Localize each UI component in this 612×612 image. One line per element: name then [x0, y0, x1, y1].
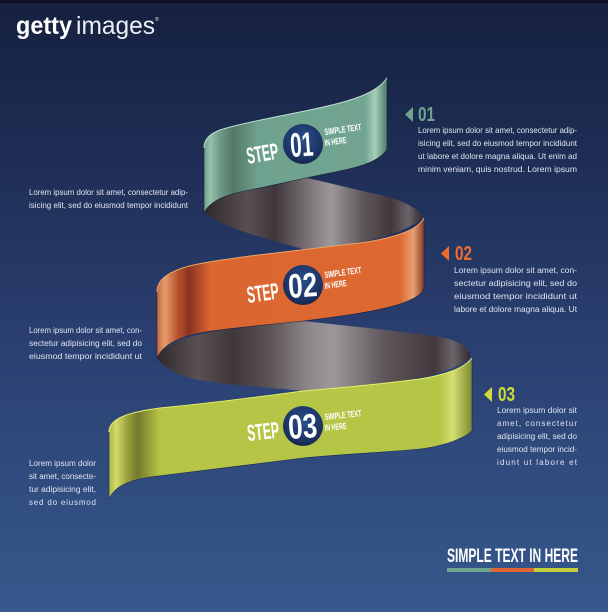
step 3 label: IN HERE	[324, 421, 347, 433]
callout 03	[484, 384, 578, 467]
left text block 1: Lorem ipsum dolor sit amet, consectetur adip-	[29, 188, 188, 197]
left text block 3	[29, 459, 96, 507]
panel: step 1 teal ribbon	[204, 78, 387, 213]
callout 01	[405, 104, 578, 174]
step 3 label: STEP	[246, 417, 280, 446]
left text block 3: Lorem ipsum dolor	[29, 459, 96, 468]
step 2 label: SIMPLE TEXT	[324, 265, 362, 280]
step 3 label: SIMPLE TEXT	[324, 408, 362, 422]
top edge highlight	[109, 358, 472, 432]
step 2 label: IN HERE	[324, 278, 347, 291]
step 2 label: 02	[287, 266, 318, 306]
inner surface: upper grey ribbon	[204, 178, 423, 249]
left text block 3: sed do eiusmod	[29, 498, 96, 507]
footer heading with colour bar	[447, 546, 578, 572]
callout 02: labore et dolore magna aliqua. Ut	[454, 305, 578, 314]
callout 02: Lorem ipsum dolor sit amet, con-	[454, 266, 577, 275]
callout 03: amet, consectetur	[497, 419, 577, 428]
callout 02: eiusmod tempor incididunt ut	[454, 292, 578, 301]
callout 02	[441, 243, 578, 314]
callout 03: Lorem ipsum dolor sit	[497, 406, 578, 415]
step 1 label	[244, 122, 362, 169]
top edge highlight	[157, 218, 424, 292]
callout 03: adipisicing elit, sed do	[497, 432, 578, 441]
left text block 1: isicing elit, sed do eiusmod tempor incididunt	[29, 201, 189, 210]
callout 03: 03	[498, 384, 515, 406]
step 1 label: IN HERE	[324, 135, 347, 148]
left text block 2	[29, 326, 143, 361]
logo: gettyimages: ®	[155, 16, 159, 23]
step 3 label: 03	[287, 407, 318, 447]
callout 02: 02	[455, 243, 472, 265]
step 2 label: STEP	[245, 278, 280, 308]
step 1 label: 01	[289, 125, 315, 165]
callout 02: sectetur adipisicing elit, sed do	[454, 279, 578, 288]
panel: step 2 orange ribbon	[157, 218, 424, 358]
step 1 label: SIMPLE TEXT	[324, 122, 362, 137]
logo: gettyimages: images	[76, 12, 155, 40]
left text block 2: Lorem ipsum dolor sit amet, con-	[29, 326, 142, 335]
left text block 1	[29, 188, 189, 210]
step 1 label: STEP	[244, 138, 280, 169]
callout 03: eiusmod tempor incid-	[497, 445, 577, 454]
callout 01: 01	[418, 104, 435, 126]
left text block 3: tur adipisicing elit,	[29, 485, 96, 494]
callout 01: minim veniam, quis nostrud. Lorem ipsum	[418, 165, 577, 174]
callout 03: idunt ut labore et	[497, 458, 578, 467]
left text block 2: eiusmod tempor incididunt ut	[29, 352, 143, 361]
inner surface: lower grey ribbon	[157, 321, 471, 391]
logo: gettyimages: getty	[16, 12, 72, 40]
left text block 3: sit amet, consecte-	[29, 472, 96, 481]
panel: step 3 green ribbon	[109, 358, 472, 499]
step 3 label	[246, 406, 362, 447]
callout 01: isicing elit, sed do eiusmod tempor incididunt	[418, 139, 578, 148]
top edge highlight	[204, 78, 387, 148]
left text block 2: sectetur adipisicing elit, sed do	[29, 339, 143, 348]
step 2 label	[245, 265, 362, 308]
callout 01: ut labore et dolore magna aliqua. Ut enim ad	[418, 152, 577, 161]
logo: gettyimages	[16, 12, 159, 40]
callout 01: Lorem ipsum dolor sit amet, consectetur adip-	[418, 126, 577, 135]
